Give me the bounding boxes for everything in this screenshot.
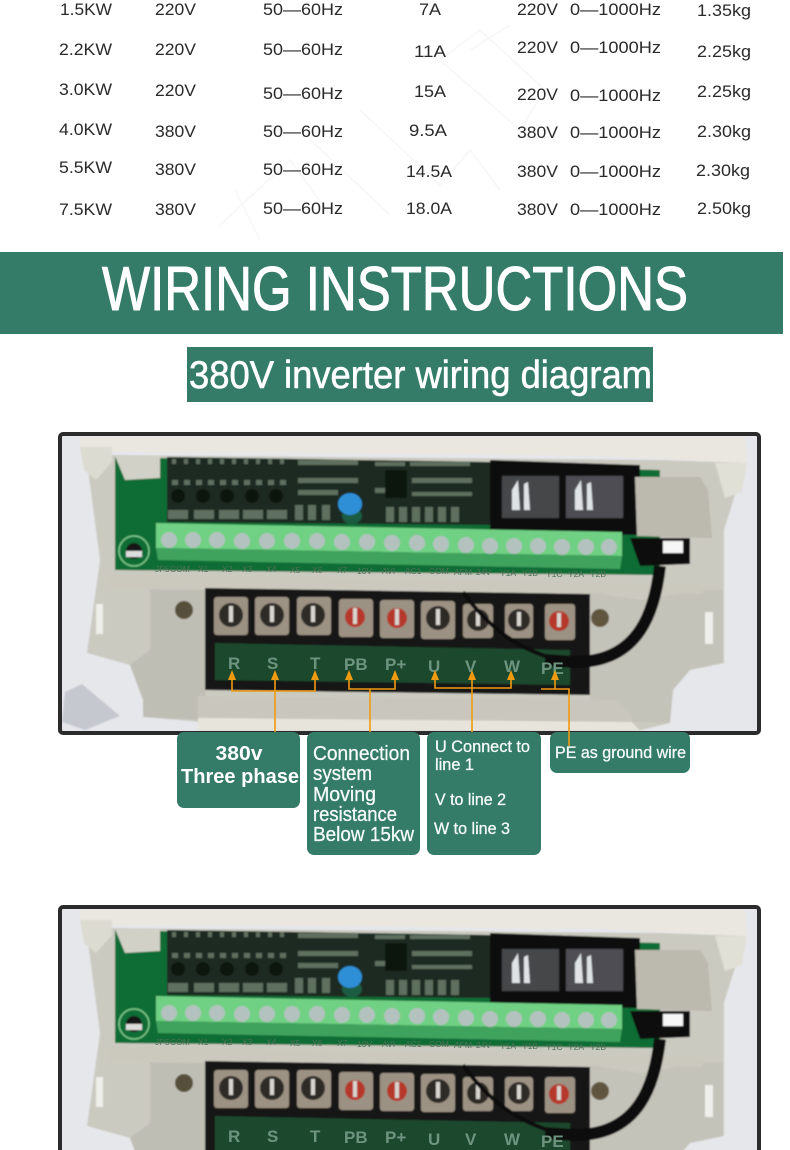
photo: second inverter view: 24V (476, 1040, 491, 1050)
row 4.0KW: 50—60Hz (263, 122, 343, 141)
callout: U V W lines (427, 732, 541, 855)
photo: second inverter view: Y1A (500, 1041, 516, 1051)
row 2.2KW: 2.2KW (59, 40, 112, 59)
row 1.5KW: 0—1000Hz (570, 0, 661, 19)
callout: 380v three phase: Three phase (181, 766, 299, 788)
row 7.5KW: 380V (155, 200, 197, 219)
row 5.5KW: 14.5A (406, 162, 453, 181)
row 2.2KW: 220V (517, 38, 559, 57)
specification table (59, 0, 751, 219)
row 5.5KW: 380V (155, 160, 197, 179)
row 3.0KW: 220V (155, 81, 197, 100)
row 4.0KW: 9.5A (409, 121, 448, 140)
callout: connection system: resistance (313, 804, 397, 826)
row 4.0KW: 4.0KW (59, 120, 112, 139)
photo: second inverter view: X2 (222, 1037, 233, 1047)
photo: second inverter view: AVI (382, 1039, 395, 1049)
inverter photo: Y2B (590, 569, 606, 579)
subheading: 380V inverter wiring diagram: 380V inverter wiring diagram (189, 354, 652, 397)
row 3.0KW: 220V (517, 85, 559, 104)
row 7.5KW (59, 199, 751, 219)
photo: inverter terminals with wiring arrows (60, 434, 759, 746)
photo: second inverter view: Y2A (568, 1042, 584, 1052)
row 5.5KW: 380V (517, 162, 559, 181)
row 2.2KW: 50—60Hz (263, 40, 343, 59)
inverter photo: X4 (266, 564, 277, 574)
callout: connection system: Below 15kw (313, 824, 415, 846)
row 7.5KW: 7.5KW (59, 200, 112, 219)
inverter photo: PE (541, 659, 564, 678)
inverter photo: V (465, 657, 477, 676)
row 1.5KW: 7A (419, 0, 442, 19)
inverter photo: PB (344, 655, 368, 674)
orange wiring arrows (228, 670, 569, 746)
inverter photo: T (310, 654, 321, 673)
inverter photo: X7 (337, 565, 348, 575)
row 3.0KW: 15A (414, 82, 447, 101)
row 3.0KW: 0—1000Hz (570, 86, 661, 105)
photo: second inverter view: 10V (357, 1039, 372, 1049)
photo: second inverter view: X3 (242, 1037, 253, 1047)
photo: second inverter view: U (428, 1130, 440, 1149)
inverter photo: JP5 (155, 564, 170, 574)
inverter photo: COM (429, 566, 449, 576)
inverter photo: S (267, 654, 278, 673)
row 1.5KW (60, 0, 751, 20)
row 2.2KW: 220V (155, 40, 197, 59)
inverter photo: X3 (242, 564, 253, 574)
row 2.2KW: 0—1000Hz (570, 38, 661, 57)
row 1.5KW: 50—60Hz (263, 0, 343, 19)
inverter photo: AFM (454, 567, 472, 577)
inverter photo: X2 (222, 564, 233, 574)
row 3.0KW (59, 80, 751, 105)
row 4.0KW: 380V (155, 122, 197, 141)
photo: second inverter view: P+ (385, 1128, 406, 1147)
inverter photo: W (504, 657, 521, 676)
inverter photo: X5 (290, 565, 301, 575)
row 4.0KW: 0—1000Hz (570, 123, 661, 142)
callout: 380v three phase: 380v (216, 743, 263, 765)
inverter photo (60, 434, 759, 733)
row 2.2KW: 11A (414, 42, 447, 61)
photo: second inverter view: T (310, 1127, 321, 1146)
row 2.2KW: 2.25kg (697, 42, 751, 61)
photo: second inverter view: PB (344, 1128, 368, 1147)
row 5.5KW: 5.5KW (59, 158, 112, 177)
callout: U V W lines: line 1 (435, 756, 474, 774)
watermark (220, 25, 545, 240)
photo: second inverter view: X5 (290, 1038, 301, 1048)
row 5.5KW: 2.30kg (696, 161, 750, 180)
photo: second inverter view: V (465, 1130, 477, 1149)
photo: second inverter view: X1 (198, 1037, 209, 1047)
row 2.2KW (59, 38, 751, 61)
callout: PE as ground wire: PE as ground wire (555, 744, 686, 762)
callout: connection system: Moving (313, 784, 376, 806)
photo: second inverter view: Y1C (546, 1042, 563, 1052)
row 4.0KW: 2.30kg (697, 122, 751, 141)
photo: second inverter view: X6 (312, 1038, 323, 1048)
inverter photo: COM (170, 564, 190, 574)
row 3.0KW: 50—60Hz (263, 84, 343, 103)
row 3.0KW: 3.0KW (59, 80, 112, 99)
photo: second inverter view: W (504, 1130, 521, 1149)
photo: second inverter view: AFM (454, 1040, 472, 1050)
row 7.5KW: 0—1000Hz (570, 200, 661, 219)
inverter photo: X1 (198, 564, 209, 574)
photo: second inverter view: AC1 (405, 1039, 422, 1049)
inverter photo: 24V (476, 567, 491, 577)
row 5.5KW: 0—1000Hz (570, 162, 661, 181)
callout: connection system: Connection (313, 743, 410, 765)
inverter photo: AVI (382, 566, 395, 576)
row 5.5KW: 50—60Hz (263, 160, 343, 179)
photo: second inverter view: COM (429, 1039, 449, 1049)
inverter photo: Y1C (546, 569, 563, 579)
callout: 380v three phase (177, 732, 300, 808)
inverter photo: AC1 (405, 566, 422, 576)
callout: connection system (307, 732, 420, 855)
photo: second inverter view: S (267, 1127, 278, 1146)
inverter photo: U (428, 657, 440, 676)
row 3.0KW: 2.25kg (697, 82, 751, 101)
photo: second inverter view: X4 (266, 1037, 277, 1047)
row 7.5KW: 50—60Hz (263, 199, 343, 218)
row 4.0KW: 380V (517, 123, 559, 142)
row 1.5KW: 1.35kg (697, 1, 751, 20)
inverter photo: Y1B (522, 568, 538, 578)
row 5.5KW (59, 158, 750, 181)
inverter photo: R (228, 654, 240, 673)
photo: second inverter view: JP5 (155, 1037, 170, 1047)
row 1.5KW: 220V (517, 0, 559, 19)
callout: U V W lines: V to line 2 (435, 791, 506, 809)
callout: connection system: system (313, 763, 372, 785)
photo: second inverter view: Y2B (590, 1042, 606, 1052)
photo: second inverter view (60, 907, 759, 1150)
row 4.0KW (59, 120, 751, 142)
row 7.5KW: 380V (517, 200, 559, 219)
row 7.5KW: 18.0A (406, 199, 453, 218)
callout: U V W lines: W to line 3 (434, 820, 510, 838)
photo: second inverter view: COM (170, 1037, 190, 1047)
photo: second inverter view: X7 (337, 1038, 348, 1048)
callout: PE as ground wire (550, 732, 690, 773)
inverter photo: 10V (357, 566, 372, 576)
inverter photo: Y1A (500, 568, 516, 578)
inverter photo: P+ (385, 655, 406, 674)
row 1.5KW: 220V (155, 0, 197, 19)
inverter photo: Y2A (568, 569, 584, 579)
row 1.5KW: 1.5KW (60, 0, 112, 19)
callout: U V W lines: U Connect to (435, 738, 530, 756)
row 7.5KW: 2.50kg (697, 199, 751, 218)
inverter photo: X6 (312, 565, 323, 575)
photo: second inverter view: Y1B (522, 1041, 538, 1051)
photo: second inverter view: R (228, 1127, 240, 1146)
